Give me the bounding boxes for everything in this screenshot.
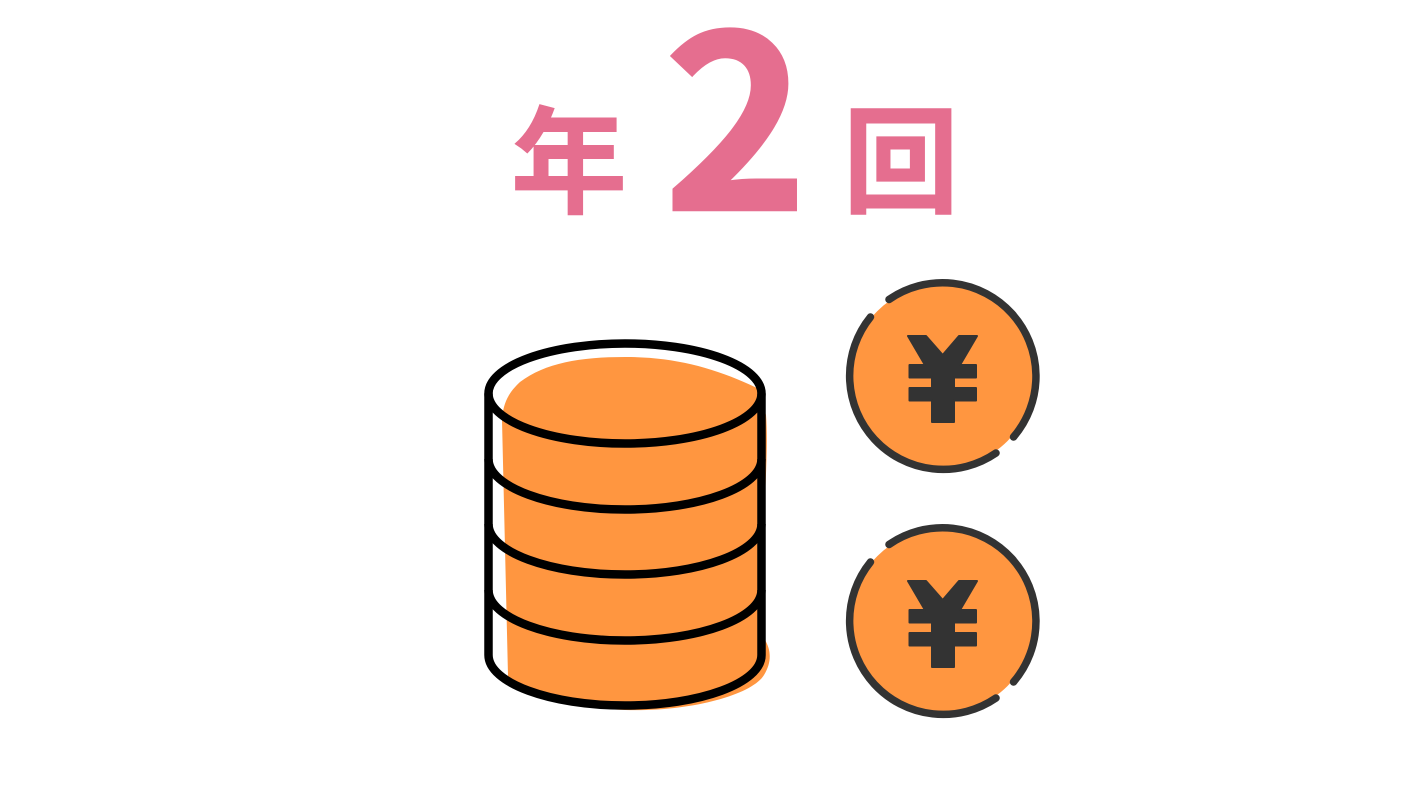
- title: twice a year: [511, 0, 959, 279]
- yen symbol: [908, 581, 977, 667]
- title character: year: 年: [511, 70, 627, 238]
- icon: yen coin top: [850, 283, 1036, 469]
- orange fill of stack: [502, 357, 770, 710]
- yen symbol: [908, 336, 977, 422]
- icon: stack of coins: [488, 344, 770, 710]
- icon: yen coin bottom: [850, 528, 1036, 714]
- stack layer lines: [488, 459, 762, 640]
- stack outline: sides and bottom: [488, 394, 762, 706]
- coin outline arcs: [850, 283, 1036, 469]
- stack outline: top ellipse: [488, 344, 762, 444]
- coin face: [850, 529, 1034, 713]
- title character: times: 回: [843, 70, 959, 238]
- coin outline arcs: [850, 528, 1036, 714]
- coin face: [850, 284, 1034, 468]
